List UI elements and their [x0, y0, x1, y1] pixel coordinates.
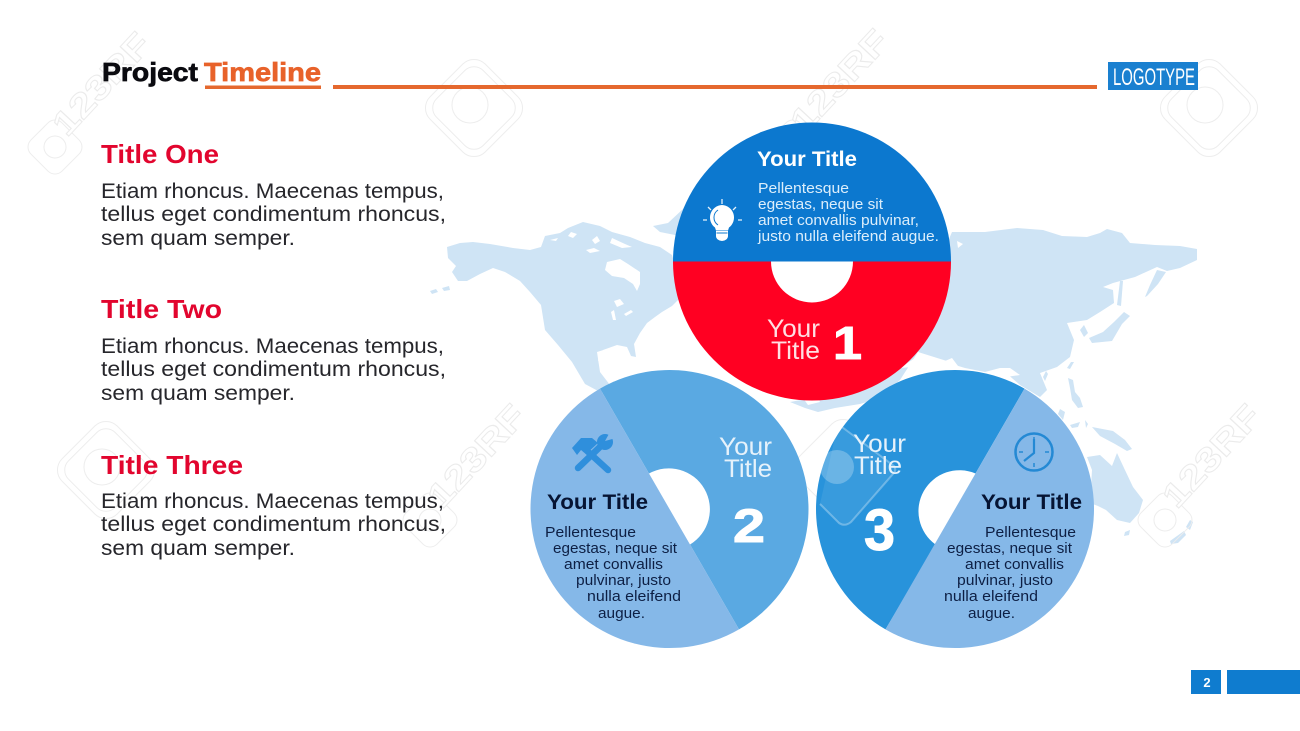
label: your title: Your	[853, 430, 906, 458]
block: title one: Etiam rhoncus. Maecenas tempus,	[101, 179, 444, 203]
block: title two: sem quam semper.	[101, 381, 295, 405]
block: title one	[101, 139, 446, 250]
circle 2	[530, 370, 809, 648]
watermark overlay	[816, 424, 896, 525]
icon: light bulb	[703, 199, 742, 241]
label: your title: Title	[724, 455, 772, 483]
label: your title	[719, 433, 772, 483]
number 1: 1	[833, 317, 862, 369]
number 3: 3	[864, 498, 895, 563]
icon: hammer and wrench	[572, 432, 616, 470]
watermark marks: 123RF	[420, 397, 534, 515]
watermark marks	[24, 22, 1269, 551]
icon: clock	[1016, 434, 1052, 470]
medium blue segment	[600, 370, 809, 629]
body text: amet convallis pulvinar,	[758, 213, 919, 229]
header rule	[205, 85, 1097, 89]
left text column	[101, 139, 446, 560]
label: your title: Your	[767, 315, 820, 343]
body text: augue.	[968, 606, 1015, 622]
title: Project Timeline: Timeline	[204, 57, 321, 87]
label: your title	[767, 315, 820, 365]
body text: Pellentesque	[545, 525, 636, 541]
block: title two	[101, 294, 446, 405]
block: title two: Title Two	[101, 294, 222, 324]
title: Project Timeline: Project	[102, 57, 198, 87]
heading: Your Title	[547, 491, 648, 514]
body text: justo nulla eleifend augue.	[757, 229, 939, 245]
body text: egestas, neque sit	[758, 197, 883, 213]
heading: Your Title	[981, 491, 1082, 514]
body text: pulvinar, justo	[957, 573, 1053, 589]
body text: Pellentesque	[758, 181, 849, 197]
circle 3	[816, 370, 1094, 648]
body text: amet convallis	[965, 557, 1064, 573]
block: title one: sem quam semper.	[101, 226, 295, 250]
label: your title	[853, 430, 906, 480]
header	[102, 57, 1198, 91]
body text: egestas, neque sit	[947, 541, 1072, 557]
map gaps: bays and inland water	[550, 232, 1020, 405]
watermark marks: 123RF	[45, 25, 159, 143]
block: title three: Etiam rhoncus. Maecenas tempus,	[101, 489, 444, 513]
block: title three: Title Three	[101, 450, 243, 480]
light blue segment	[530, 389, 739, 648]
block: title three: tellus eget condimentum rhoncus,	[101, 512, 446, 536]
heading: Your Title	[757, 148, 857, 171]
label: your title: Title	[854, 452, 902, 480]
body text	[757, 181, 939, 245]
body text: augue.	[598, 606, 645, 622]
block: title two: Etiam rhoncus. Maecenas tempus,	[101, 334, 444, 358]
watermark marks: 123RF	[783, 22, 897, 140]
block: title one: Title One	[101, 139, 219, 169]
body text: Pellentesque	[985, 525, 1076, 541]
body text: egestas, neque sit	[553, 541, 677, 557]
world map	[430, 200, 1197, 544]
label: your title: Title	[771, 337, 820, 365]
block: title one: tellus eget condimentum rhoncus,	[101, 202, 446, 226]
dark blue segment	[816, 370, 1024, 629]
number 2: 2	[733, 499, 765, 552]
body text: amet convallis	[564, 557, 663, 573]
block: title two: tellus eget condimentum rhoncus,	[101, 357, 446, 381]
body text	[545, 525, 681, 622]
blue upper half	[673, 122, 951, 262]
logotype: LOGOTYPE	[1113, 64, 1195, 91]
block: title three: sem quam semper.	[101, 536, 295, 560]
red lower half with hole	[673, 262, 951, 400]
body text: nulla eleifend	[587, 589, 681, 605]
logotype	[1108, 62, 1198, 91]
body text	[944, 525, 1076, 622]
circle 1	[673, 122, 951, 400]
page number: 2	[1203, 675, 1211, 690]
light blue segment	[886, 389, 1094, 648]
label: your title: Your	[719, 433, 772, 461]
watermark marks: 123RF	[1155, 397, 1269, 515]
page number	[1191, 670, 1300, 694]
block: title three	[101, 450, 446, 560]
body text: pulvinar, justo	[576, 573, 671, 589]
body text: nulla eleifend	[944, 589, 1038, 605]
title: Project Timeline	[102, 57, 321, 87]
